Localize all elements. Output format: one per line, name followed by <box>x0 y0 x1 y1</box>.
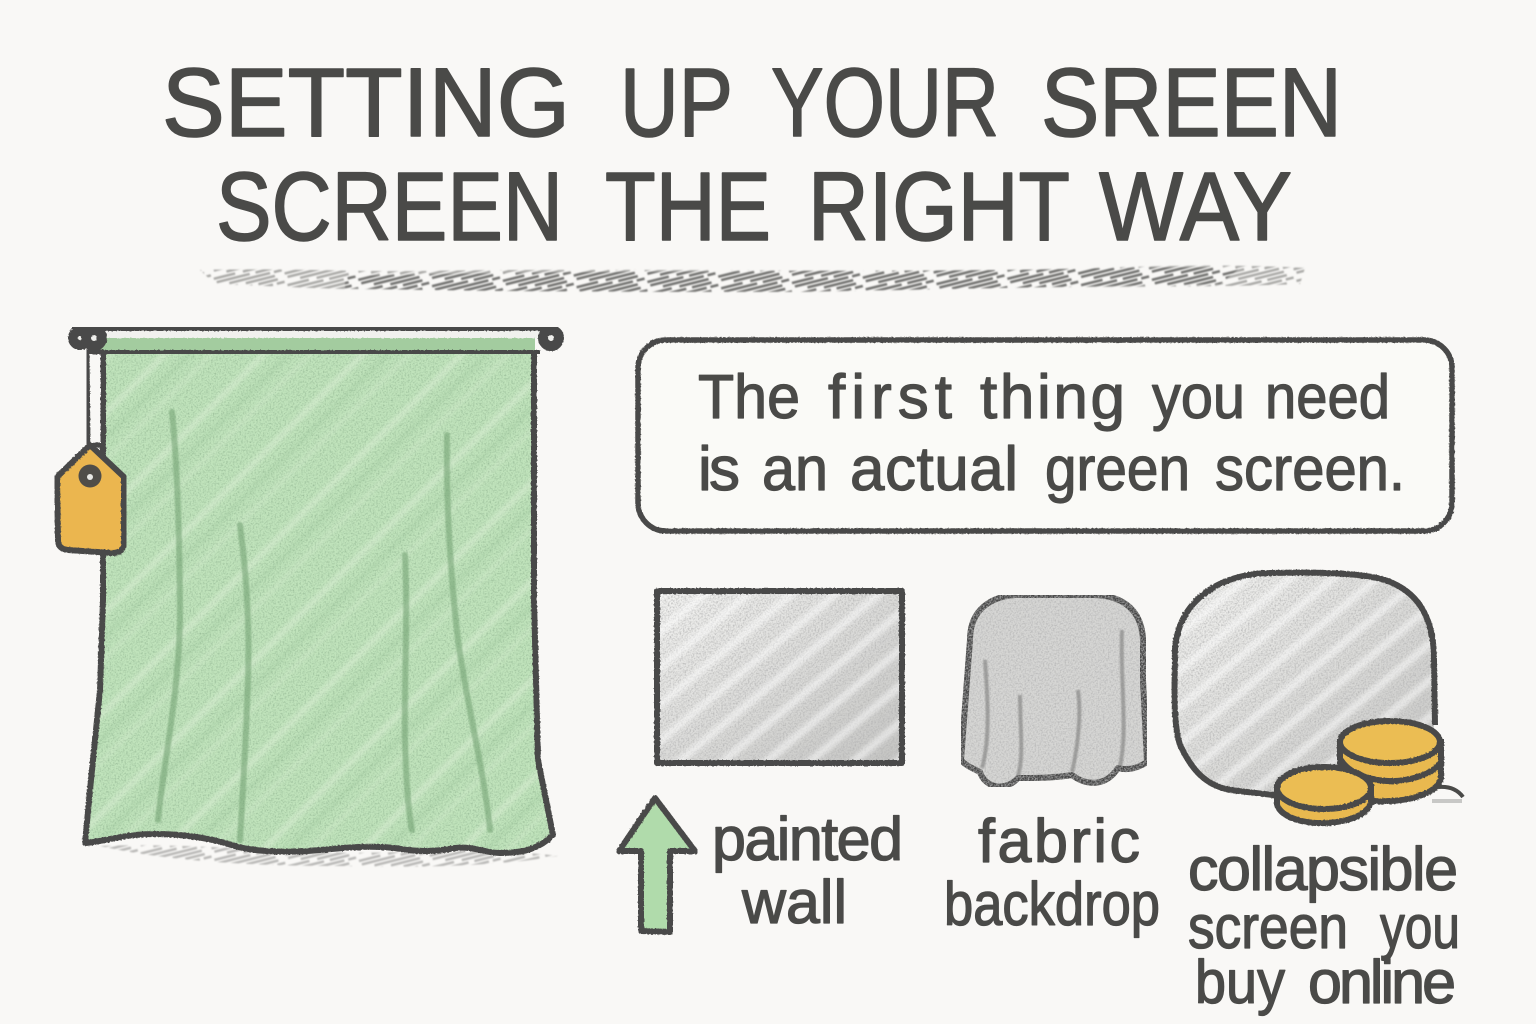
title: YOUR <box>771 48 999 157</box>
callout: intro text: The <box>698 363 800 432</box>
callout: intro text: actual <box>850 435 1018 504</box>
option: collapsible screen <box>1170 570 1463 1016</box>
icon: wall rectangle <box>650 585 910 770</box>
title: SETTING <box>162 48 570 157</box>
label: collapsible screen you buy online: collapsible <box>1188 835 1458 903</box>
callout: intro text: screen. <box>1215 435 1405 504</box>
callout: intro text: thing <box>980 363 1125 432</box>
title: SCREEN <box>216 152 563 261</box>
callout: intro text <box>638 340 1452 531</box>
label: collapsible screen you buy online: you <box>1380 893 1460 961</box>
label: fabric backdrop: backdrop <box>944 870 1160 938</box>
tag string <box>87 352 103 445</box>
title: WAY <box>1099 152 1292 261</box>
title: SREEN <box>1041 48 1342 157</box>
label: collapsible screen you buy online: buy <box>1195 948 1285 1016</box>
icon: coin stack <box>1277 721 1441 823</box>
curtain floor shadow <box>100 845 558 867</box>
callout: intro text: you <box>1152 363 1245 432</box>
label: collapsible screen you buy online: screen <box>1188 893 1348 961</box>
icon: green up arrow <box>619 798 695 932</box>
curtain rod <box>72 328 559 353</box>
callout: intro text: green <box>1045 435 1190 504</box>
icon: draped fabric <box>961 595 1147 787</box>
callout: intro text: first <box>828 363 952 432</box>
label: collapsible screen you buy online <box>1188 835 1460 1016</box>
title <box>162 48 1342 261</box>
title: THE <box>605 152 771 261</box>
label: painted wall <box>712 805 903 936</box>
label: painted wall: wall <box>741 868 847 936</box>
callout: intro text: need <box>1265 363 1390 432</box>
label: fabric backdrop <box>944 807 1160 938</box>
title: RIGHT <box>808 152 1070 261</box>
label: fabric backdrop: fabric <box>978 807 1140 875</box>
curtain fabric <box>80 340 560 860</box>
label: painted wall: painted <box>712 805 903 873</box>
option: painted wall <box>619 585 910 936</box>
price tag <box>57 445 124 553</box>
title: UP <box>620 48 733 157</box>
option: fabric backdrop <box>944 595 1160 938</box>
panel: green screen curtain <box>57 328 560 867</box>
icon: collapsible screen disc <box>1170 570 1463 805</box>
callout: intro text: is <box>698 435 740 504</box>
label: collapsible screen you buy online: online <box>1308 948 1456 1016</box>
curtain outline <box>85 352 553 853</box>
callout: intro text: an <box>762 435 828 504</box>
curtain folds <box>158 412 490 840</box>
title underline scribble <box>200 266 1305 292</box>
